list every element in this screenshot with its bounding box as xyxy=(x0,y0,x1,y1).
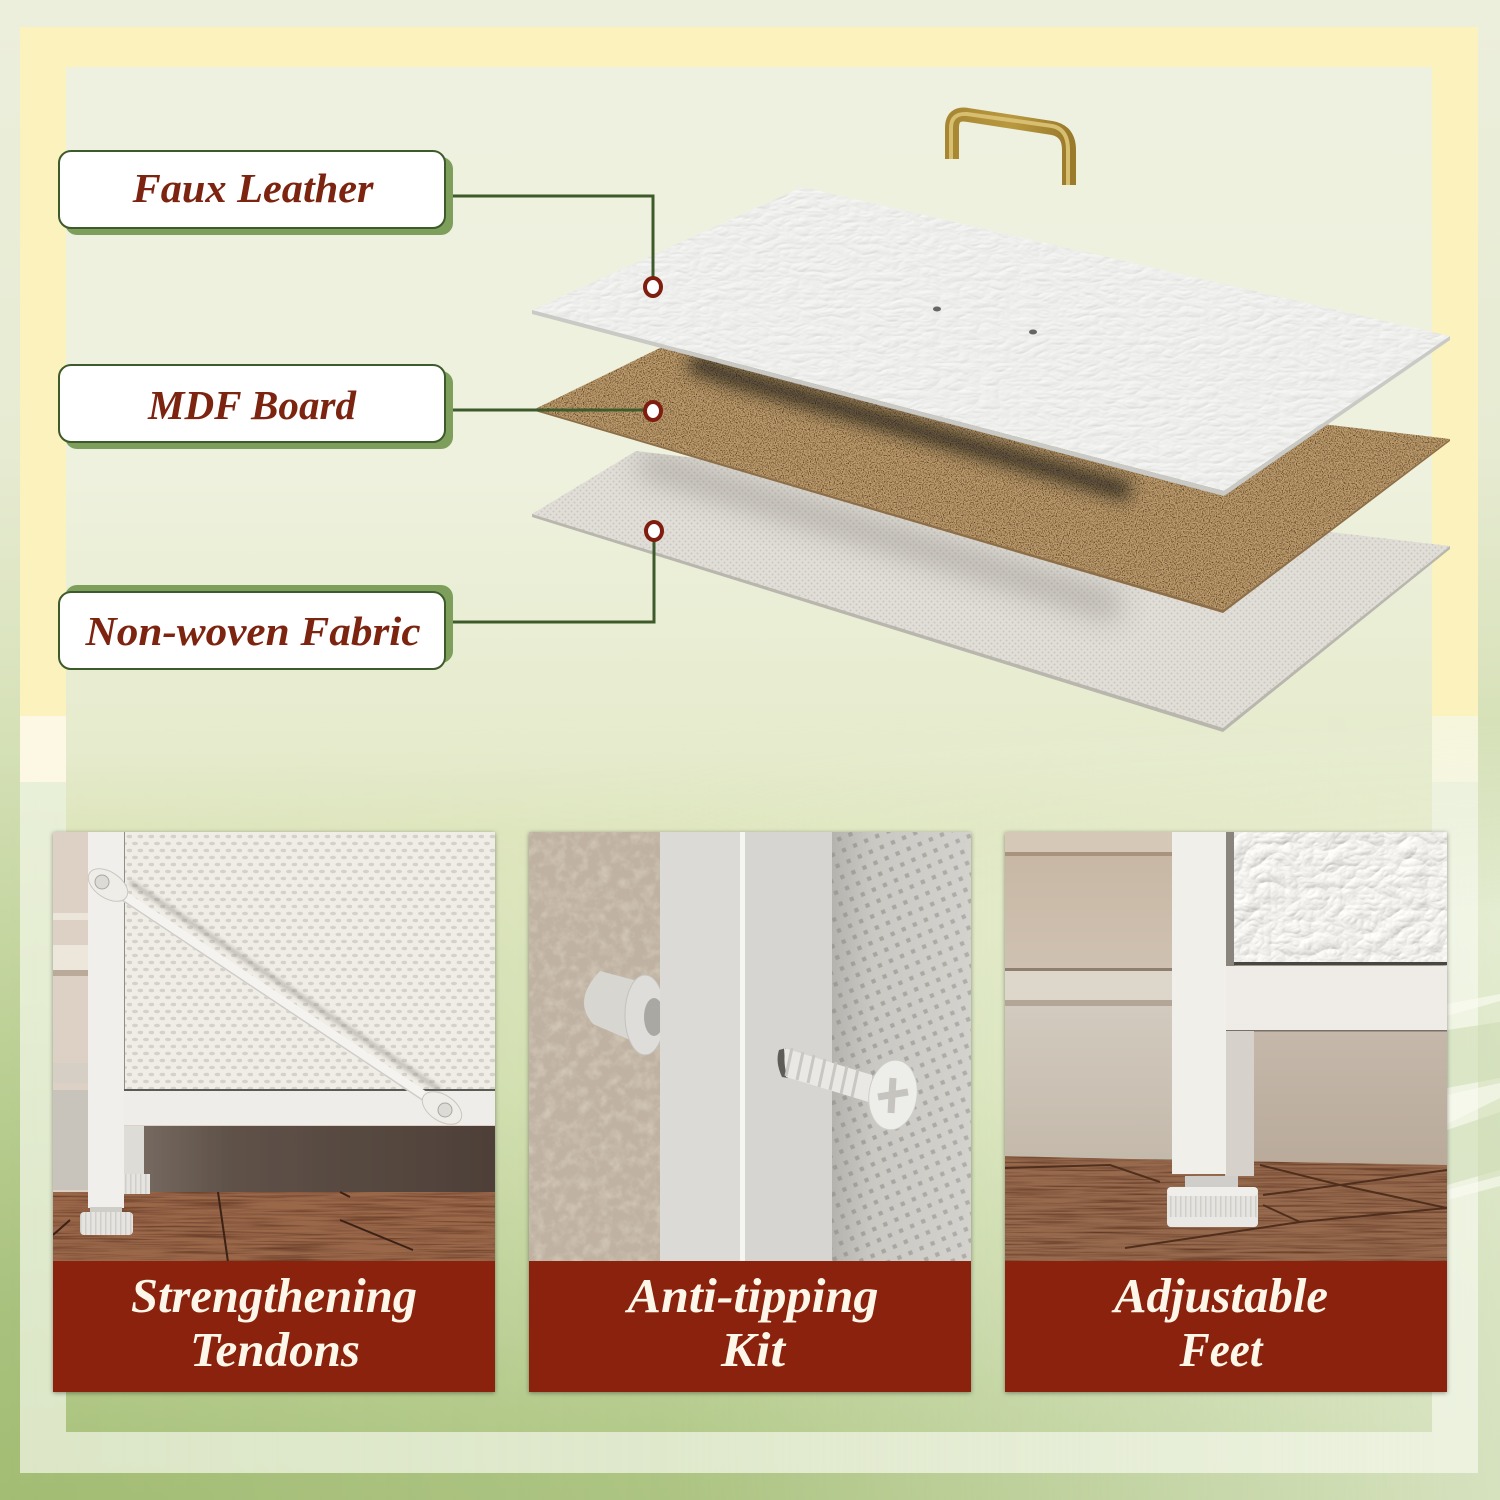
callout: Faux Leather xyxy=(59,151,661,296)
callout: Non-woven Fabric: Non-woven Fabric xyxy=(84,608,420,654)
panel: strengthening tendons xyxy=(53,832,495,1392)
callout: Non-woven Fabric xyxy=(59,522,662,669)
callout: MDF Board: MDF Board xyxy=(147,382,356,428)
layer: MDF board xyxy=(535,347,1450,613)
panel caption xyxy=(624,1268,878,1377)
icon: diagonal brace xyxy=(82,862,468,1131)
panel caption xyxy=(1111,1268,1328,1377)
layer: non-woven fabric xyxy=(532,451,1450,732)
icon: screw xyxy=(778,1048,922,1133)
panel caption: Strengthening xyxy=(131,1268,417,1323)
callout: MDF Board xyxy=(59,365,661,449)
layer: faux leather xyxy=(532,187,1450,496)
panel caption: Feet xyxy=(1179,1322,1264,1377)
icon: brass handle xyxy=(951,114,1069,185)
panel: anti-tipping kit xyxy=(529,832,971,1392)
panel caption: Adjustable xyxy=(1111,1268,1328,1323)
panel caption: Tendons xyxy=(190,1322,360,1377)
panel: adjustable feet xyxy=(1005,832,1447,1392)
callout: Faux Leather: Faux Leather xyxy=(131,165,375,211)
panel caption xyxy=(131,1268,417,1377)
decorative brush strokes xyxy=(1447,994,1500,1200)
panel caption: Kit xyxy=(720,1322,786,1377)
icon: levelling foot xyxy=(1167,1176,1258,1227)
icon: wall anchor xyxy=(584,971,665,1055)
panel caption: Anti-tipping xyxy=(624,1268,878,1323)
